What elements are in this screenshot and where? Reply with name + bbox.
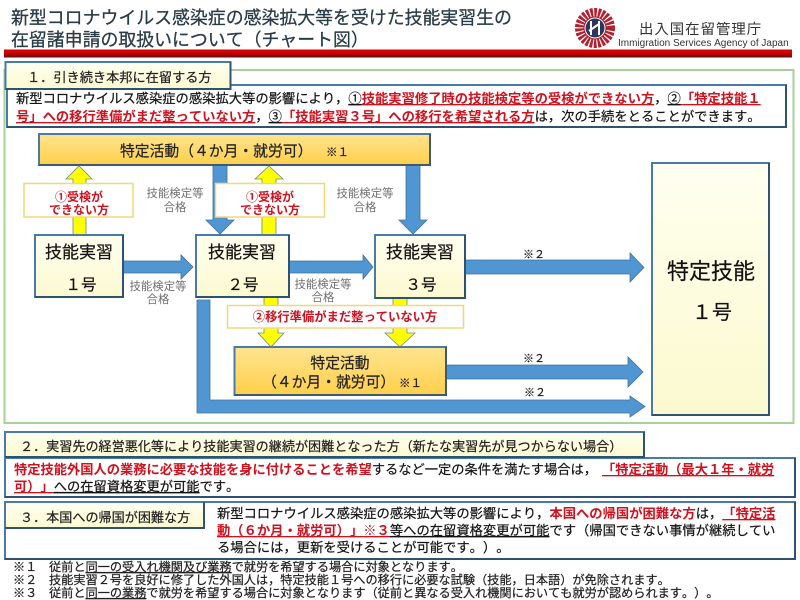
label: exam passed (1号 to 2号): 合格 [147,292,170,306]
agency name [618,21,789,49]
callout: exam not possible (1号): できない方 [49,202,109,217]
footnotes: ※１ [13,560,37,574]
panel: lower 特定活動: 特定活動 [310,355,370,372]
arrow: 特定活動 down to 2号 [206,165,234,234]
panel: section 1 description: 号」への移行準備がまだ整っていない方，③「技能実習３号」への移行を希望される方は，次の手続をとることができます。 [16,108,761,124]
footnotes: 技能実習２号を良好に修了した外国人は，特定技能１号への移行に必要な試験（技能，日本語）が免除されます。 [49,572,670,587]
panel: 技能実習3号 [375,235,465,298]
icon: agency emblem [580,12,610,44]
note: ※2 upper: ※２ [523,249,545,261]
footnotes: ※２ [13,573,37,587]
panel: top 特定活動: ※１ [326,147,349,159]
arrow: 2号 up to 特定活動 [255,166,283,235]
label: exam passed (2号 to 3号): 合格 [312,290,335,304]
label: exam passed (2号 to 3号) [295,277,351,304]
title: 新型コロナウイルス感染症の感染拡大等を受けた技能実習生の [11,8,512,28]
panel: section 3 description: 新型コロナウイルス感染症の感染拡大等の影響により，本国への帰国が困難な方は，「特定活 [217,505,775,521]
title [11,8,512,50]
note: ※2 middle: ※２ [523,353,545,365]
panel: section 3 description [5,502,795,559]
footnotes: ※３ [13,586,37,600]
label: exam passed (upper left): 合格 [164,200,187,214]
heading: section 1: １．引き続き本邦に在留する方 [27,70,212,85]
note: ※2 lower: ※２ [524,387,546,399]
heading: section 3: ３．本国への帰国が困難な方 [20,509,190,525]
footnotes: 従前と同一の業務で就労を希望する場合に対象となります（従前と異なる受入れ機関においても就労が認められます。）。 [49,585,718,600]
callout: preparation not ready: ②移行準備がまだ整っていない方 [253,309,437,324]
panel: 技能実習1号: 技能実習 [45,243,113,262]
heading: section 2: ２．実習先の経営悪化等により技能実習の継続が困難となった方（新たな実習先が見つからない場合） [20,438,622,454]
agency name: Immigration Services Agency of Japan [618,38,789,49]
arrow: 2号 to 3号 [289,255,373,279]
agency name: 出入国在留管理庁 [639,21,762,38]
panel: section 2 description: 特定技能外国人の業務に必要な技能を身に付けることを希望するなど一定の条件を満たす場合は， [14,461,597,477]
label: exam passed (upper right): 合格 [354,200,377,214]
label: exam passed (upper left): 技能検定等 [147,186,203,200]
arrow: 1号 up to 特定活動 [66,166,92,235]
callout: preparation not ready [228,306,464,328]
arrow: L-shaped route from 2号 to 特定技能 [197,300,645,417]
panel: section 3 description: る場合には，更新を受けることが可能です。）。 [217,540,510,555]
arrow: 3号 to 特定技能 [465,253,644,282]
panel: 技能実習3号: 技能実習 [386,243,454,262]
panel: section 2 description [5,458,795,497]
panel: 技能実習1号 [35,235,123,297]
label: exam passed (1号 to 2号): 技能検定等 [130,279,186,293]
panel: lower 特定活動: ※１ [399,378,422,390]
red header bar [4,50,792,58]
panel: 技能実習2号 [196,235,289,297]
callout: exam not possible (2号): ①受検が [246,189,294,204]
label: exam passed (upper right): 技能検定等 [337,186,393,200]
footnotes: 従前と同一の受入れ機関及び業務で就労を希望する場合に対象となります。 [49,559,463,574]
panel: 技能実習3号: ３号 [405,276,437,294]
callout: exam not possible (1号): ①受検が [55,189,103,204]
footnotes [13,559,718,600]
callout: exam not possible (1号) [24,184,133,217]
panel: top 特定活動: 特定活動（４か月・就労可） [120,143,312,160]
panel: 特定技能1号: 特定技能 [667,259,755,284]
panel: 特定技能1号 [652,163,769,415]
panel: section 1 description: 新型コロナウイルス感染症の感染拡大等の影響により，①技能実習修了時の技能検定等の受検ができない方，②「特定技能１ [16,90,761,106]
label: exam passed (upper left) [147,186,203,214]
panel: section 2 description: 「特定活動（最大１年・就労 [602,461,774,477]
arrow: 1号 to 2号 [123,255,193,279]
panel: 技能実習1号: １号 [65,276,97,294]
panel: section 2 description: 可）」への在留資格変更が可能です。 [14,479,239,494]
arrow: lower 特定活動 to 特定技能 [446,357,643,387]
callout: exam not possible (2号): できない方 [240,202,300,217]
label: exam passed (1号 to 2号) [130,279,186,306]
arrow: 3号 down to lower 特定活動 [385,298,415,347]
panel: 特定技能1号: １号 [692,302,732,324]
panel: lower 特定活動: （４か月・就労可） [262,374,395,391]
panel: section 1 description [7,85,786,127]
title: 在留諸申請の取扱いについて（チャート図） [11,30,369,50]
panel: section 1 outer frame [4,70,794,423]
heading: section 2 [5,432,644,457]
panel: top 特定活動 [39,134,430,165]
panel: 技能実習2号: ２号 [227,276,259,294]
label: exam passed (2号 to 3号): 技能検定等 [295,277,351,291]
arrow: 特定活動 down to 3号 [399,165,427,234]
panel: lower 特定活動 [234,347,446,395]
arrow: 2号 down to lower 特定活動 [258,297,284,347]
heading: section 3 [5,502,204,528]
label: exam passed (upper right) [337,186,393,214]
heading: section 1 [6,62,230,89]
panel: section 3 description: 動（６か月・就労可）」※３等への在留資格変更が可能です（帰国できない事情が継続してい [217,522,775,538]
callout: exam not possible (2号) [216,184,324,217]
panel: 技能実習2号: 技能実習 [208,243,276,262]
